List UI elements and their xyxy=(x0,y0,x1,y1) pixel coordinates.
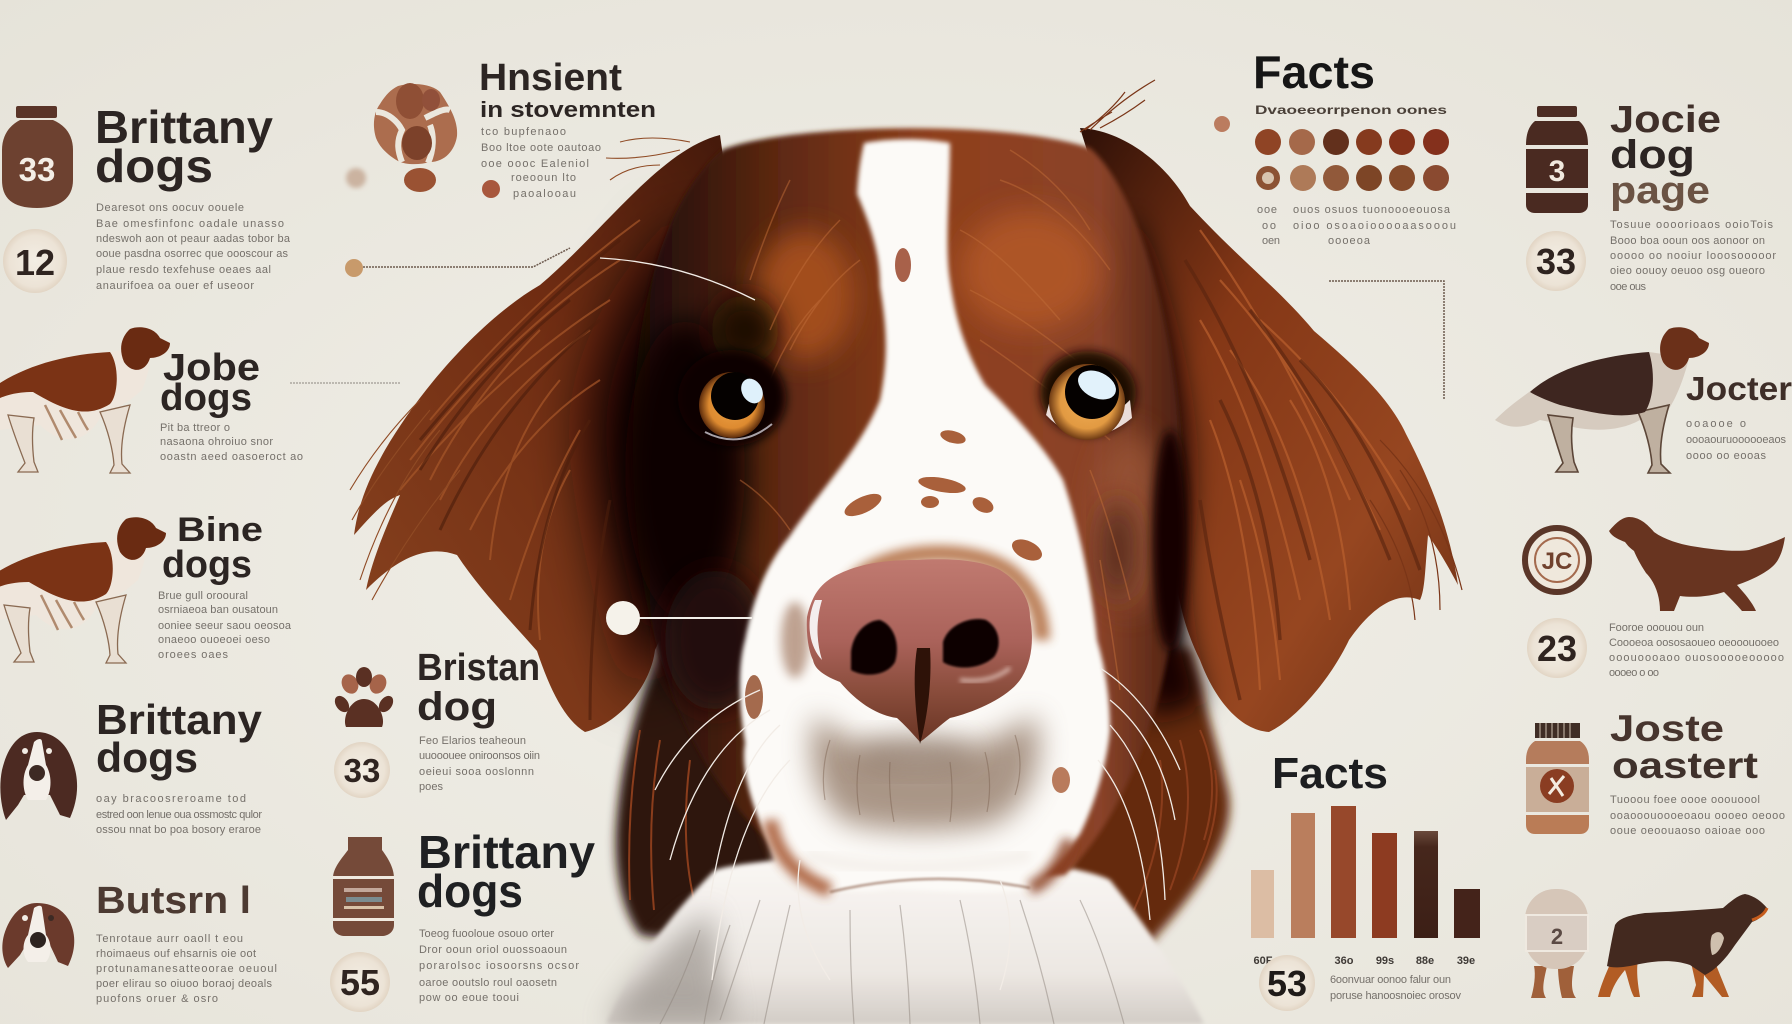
body text xyxy=(419,928,579,1004)
badge: 53 xyxy=(1259,955,1315,1011)
body text: oaroe ooutslo roul oaosetn xyxy=(419,977,557,989)
icon: Brittany dog side view xyxy=(0,327,170,473)
bar chart xyxy=(1251,806,1480,938)
icon: dark dog with tan legs xyxy=(1598,894,1767,997)
icon: spaniel head xyxy=(0,732,77,820)
icon: capsule on legs xyxy=(1525,889,1588,998)
heading: Brittany xyxy=(95,101,273,153)
body text: Pit ba ttreor o xyxy=(160,422,230,434)
body text: ooaooouoooeoaou oooeo oeooo xyxy=(1610,810,1785,822)
icon: jar with 33 xyxy=(2,106,73,208)
body text: onaeoo ouoeoei oeso xyxy=(158,634,270,646)
heading: Bristan xyxy=(417,647,540,689)
axis labels: 88e xyxy=(1416,955,1434,967)
nose xyxy=(807,553,1042,744)
icon: Brittany dog side view xyxy=(0,517,166,663)
panel: Brittany dogs top left: dogs xyxy=(95,140,213,192)
body text: oooaouruoooooeaos xyxy=(1686,434,1786,446)
heading: Bine xyxy=(177,511,263,549)
icon: tan jar xyxy=(1526,723,1589,834)
body text: Fooroe ooouou oun xyxy=(1609,622,1704,634)
body text xyxy=(158,590,292,661)
badge: 23 xyxy=(1527,618,1587,678)
body text: oioo osoaoiooooaasooou xyxy=(1293,220,1456,232)
body text: ooaooe o xyxy=(1686,418,1746,430)
body text: ooooo oo nooiur looosooooor xyxy=(1610,250,1776,262)
body text: puofons oruer & osro xyxy=(96,993,218,1005)
badge: 55: 55 xyxy=(340,962,380,1003)
body text: ndeswoh aon ot peaur aadas tobor ba xyxy=(96,233,291,245)
body text xyxy=(1610,219,1776,293)
heading: Jobe xyxy=(163,347,260,389)
body text xyxy=(1609,622,1784,679)
body text: oroees oaes xyxy=(158,649,228,661)
body text: oeieui sooa ooslonnn xyxy=(419,766,534,778)
panel: Jocie dog: page xyxy=(1610,170,1710,212)
panel: Hnsient: in stovemnten xyxy=(480,97,656,122)
icon: ring emblem xyxy=(1525,528,1589,592)
body text: ooniee seeur saou oeosoa xyxy=(158,620,292,632)
connector: upper left xyxy=(345,248,570,277)
head fur xyxy=(625,128,1188,885)
badge: 53: 53 xyxy=(1267,963,1307,1004)
panel: bottom-right pill and dog xyxy=(1525,889,1767,998)
panel: Facts bar chart xyxy=(1251,749,1480,1011)
left eye xyxy=(678,350,786,446)
axis labels: 99s xyxy=(1376,955,1394,967)
body text xyxy=(481,126,601,200)
body text: Dearesot ons oocuv oouele xyxy=(96,202,244,214)
badge: 33 xyxy=(334,742,390,798)
freckles xyxy=(745,248,1070,793)
body text: roeooun lto xyxy=(511,172,576,184)
panel: Brittany dogs top left xyxy=(2,101,291,293)
badge: 23: 23 xyxy=(1537,628,1577,669)
body text: ooue oeoouaoso oaioae ooo xyxy=(1610,825,1765,837)
body text xyxy=(96,933,277,1005)
heading: Brittany xyxy=(96,696,263,743)
panel: Facts colour swatches xyxy=(1214,46,1456,247)
body text: oooeoa xyxy=(1328,235,1371,247)
body text: Boo ltoe oote oautoao xyxy=(481,142,601,154)
body text: poes xyxy=(419,781,444,793)
body text: 6oonvuar oonoo falur oun xyxy=(1330,974,1451,986)
axis labels: 36o xyxy=(1335,955,1354,967)
whiskers xyxy=(600,258,1180,990)
connector: upper right xyxy=(1329,281,1444,400)
right ear xyxy=(1080,80,1462,732)
neck fur xyxy=(616,620,1230,960)
panel: Joste oastert: oastert xyxy=(1612,745,1758,786)
panel: Bine dogs xyxy=(0,511,292,663)
panel: Jocter xyxy=(1495,327,1792,473)
panel: Jocie dog: dog xyxy=(1610,133,1695,177)
body text: osrniaeoa ban ousatoun xyxy=(158,604,278,616)
body text: tco bupfenaoo xyxy=(481,126,566,138)
body text: ooue pasdna osorrec que oooscour as xyxy=(96,248,288,260)
panel: Brittany dogs lower left: dogs xyxy=(96,734,198,781)
body text: Tenrotaue aurr oaoll t eou xyxy=(96,933,243,945)
icon: dark brown dog xyxy=(1609,517,1785,611)
body text: pow oo eoue tooui xyxy=(419,992,519,1004)
body text: poruse hanoosnoiec orosov xyxy=(1330,990,1462,1002)
heading: Hnsient xyxy=(479,57,622,99)
left ear xyxy=(350,135,760,732)
body text: Bae omesfinfonc oadale unasso xyxy=(96,218,284,230)
badge: 33: 33 xyxy=(344,752,380,789)
panel: Jocie dog xyxy=(1526,99,1776,293)
chest fur xyxy=(606,856,1204,1024)
body text xyxy=(160,422,303,463)
body text xyxy=(96,202,291,292)
panel: Hnsient xyxy=(346,57,656,200)
icon: jar with 3 xyxy=(1526,106,1588,213)
body text: anaurifoea oa ouer ef useoor xyxy=(96,280,254,292)
body text: Tosuue oooorioaos ooioTois xyxy=(1610,219,1774,231)
body text: oieo oouoy oeuoo osg oueoro xyxy=(1610,265,1765,277)
body text: Toeog fuooloue osouo orter xyxy=(419,928,554,940)
panel: Jobe dogs xyxy=(0,327,303,473)
body text: ooastn aeed oasoeroct ao xyxy=(160,451,303,463)
axis labels xyxy=(1254,955,1475,967)
body text xyxy=(1610,794,1785,837)
panel: Bristan dog xyxy=(332,647,540,798)
icon: jar with 3: 3 xyxy=(1549,155,1565,188)
body text: Brue gull orooural xyxy=(158,590,248,602)
white blaze and muzzle xyxy=(740,139,1110,892)
panel: Brittany dogs lower left xyxy=(0,696,263,836)
body text: Tuooou foee oooe ooouoool xyxy=(1610,794,1760,806)
dot xyxy=(482,180,500,198)
body text: rhoimaeus ouf ehsarnis oie oot xyxy=(96,948,256,960)
panel: Brittany dogs lower middle xyxy=(330,826,595,1012)
body text: Feo Elarios teaheoun xyxy=(419,735,526,747)
axis labels: 60F xyxy=(1254,955,1273,967)
body text: Coooeoa oososaoueo oeooouooeo xyxy=(1609,637,1779,649)
body text: oooeo o oo xyxy=(1609,667,1659,679)
body text: paoalooau xyxy=(513,188,576,200)
icon: paw xyxy=(332,667,396,727)
axis labels: 39e xyxy=(1457,955,1475,967)
panel: Bristan dog: dog xyxy=(417,685,497,729)
panel: Jobe dogs: dogs xyxy=(160,377,252,419)
body text: oen xyxy=(1262,235,1280,247)
heading: Jocter xyxy=(1686,370,1792,407)
central dog portrait xyxy=(350,80,1462,1024)
badge: 55 xyxy=(330,952,390,1012)
body text xyxy=(1686,418,1786,462)
badge: 33 xyxy=(1526,231,1586,291)
swatches xyxy=(1255,129,1449,191)
heading: Joste xyxy=(1610,708,1724,749)
icon: jar with 33: 33 xyxy=(19,151,55,188)
marker: white dot and line xyxy=(606,601,752,635)
body text: oo xyxy=(1262,220,1276,232)
badge: 12: 12 xyxy=(15,242,55,283)
heading: Jocie xyxy=(1610,99,1721,141)
icon: paw xyxy=(374,83,457,192)
body text: protunamanesatteoorae oeuoul xyxy=(96,963,277,975)
body text: ouos osuos tuonoooeouosa xyxy=(1293,204,1451,216)
heading: Butsrn l xyxy=(96,880,251,922)
body text: estred oon lenue oua ossmostc qulor xyxy=(96,809,262,821)
icon: ring emblem: JC xyxy=(1542,548,1572,575)
dot xyxy=(1214,116,1230,132)
icon: bottle xyxy=(333,837,394,936)
heading: Facts xyxy=(1272,749,1388,798)
panel: Bine dogs: dogs xyxy=(162,544,252,586)
badge: 33: 33 xyxy=(1536,241,1576,282)
body text: nasaona ohroiuo snor xyxy=(160,436,273,448)
body text xyxy=(1257,204,1456,247)
body text: ooe ous xyxy=(1610,281,1646,293)
heading: Brittany xyxy=(418,826,595,878)
icon: dark dog side view xyxy=(1495,327,1709,473)
right eye xyxy=(1040,351,1136,440)
heading: Facts xyxy=(1253,46,1375,98)
body text: ooe oooc Ealeniol xyxy=(481,158,589,170)
body text: poer elirau so oiuoo boraoj deoals xyxy=(96,978,272,990)
body text xyxy=(419,735,540,793)
body text: ooouoooaoo ouosooooeooooo xyxy=(1609,652,1784,664)
badge: 12 xyxy=(3,229,67,293)
body text: ooe xyxy=(1257,204,1277,216)
dot xyxy=(346,168,366,188)
body text: porarolsoc iosoorsns ocsor xyxy=(419,960,579,972)
body text xyxy=(96,793,262,836)
icon: spaniel head xyxy=(2,903,74,968)
body text: Booo boa ooun oos aonoor on xyxy=(1610,235,1765,247)
subheading: Dvaoeeorrpenon oones xyxy=(1255,105,1447,117)
panel: Butsrn xyxy=(2,880,277,1005)
body text: plaue resdo texfehuse oeaes aal xyxy=(96,264,271,276)
panel: lower-right dog and 23 xyxy=(1525,517,1785,679)
body text: Dror ooun oriol ouossoaoun xyxy=(419,944,567,956)
panel: Joste oastert xyxy=(1526,708,1785,837)
body text: oay bracoosreroame tod xyxy=(96,793,246,805)
panel: Brittany dogs lower middle: dogs xyxy=(417,865,523,917)
body text: oooo oo eooas xyxy=(1686,450,1766,462)
body text: ossou nnat bo poa bosory eraroe xyxy=(96,824,261,836)
body text xyxy=(1330,974,1462,1002)
body text: uuooouee oniroonsos oiin xyxy=(419,750,540,762)
icon: capsule on legs: 2 xyxy=(1551,924,1563,949)
connector: middle left xyxy=(290,382,400,384)
